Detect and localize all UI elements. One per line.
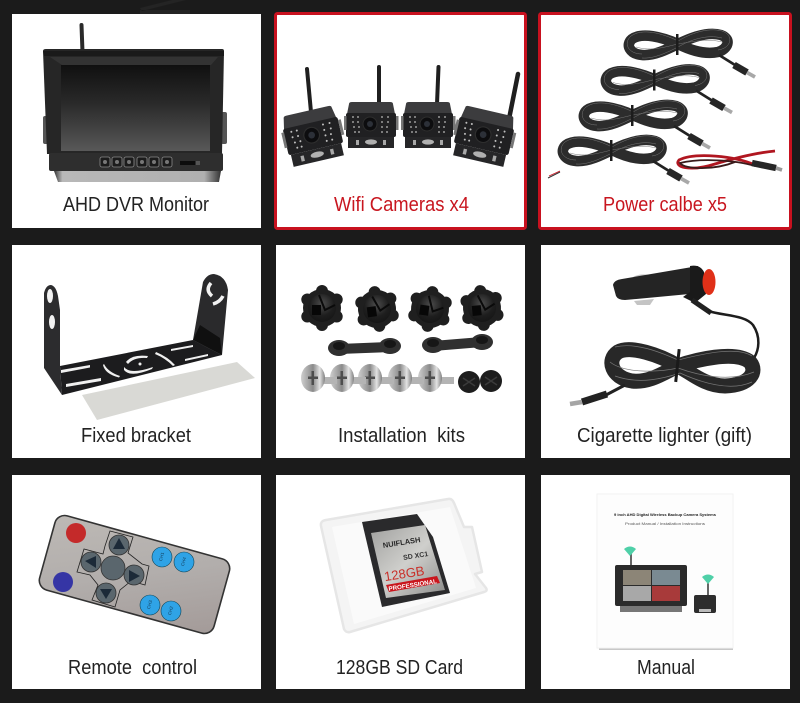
icon: manual camera — [694, 580, 716, 613]
label: Fixed bracket: Fixed bracket — [81, 425, 191, 447]
icon: metal bracket — [44, 274, 228, 395]
label: Installation kits: Installation kits — [338, 425, 465, 447]
icon: adhesive tape strip — [82, 362, 255, 420]
label: Power calbe x5: Power calbe x5 — [603, 194, 727, 216]
manual subtitle: Product Manual / Installation Instructions — [625, 522, 705, 526]
icon: knob 1 — [301, 285, 343, 331]
icon: cable coil 1 — [627, 30, 755, 77]
icon: lighter plug — [613, 266, 716, 313]
label: Manual: Manual — [637, 657, 695, 679]
icon: DVR monitor — [43, 25, 227, 182]
label: Remote control: Remote control — [68, 657, 197, 679]
icon: black caps — [458, 370, 502, 393]
manual title: 9 inch AHD Digital Wireless Backup Camera Systems — [614, 512, 716, 517]
channel buttons: CH1 — [158, 551, 165, 562]
icon: cable coil with plug — [570, 311, 758, 404]
icon: SD card: PROFESSIONAL — [388, 578, 438, 593]
icon: SD card: 128GB — [383, 563, 425, 584]
button: mute — [53, 572, 73, 592]
channel buttons: CH2 — [167, 605, 174, 616]
icon: cable coil 3 — [582, 101, 710, 148]
button: power — [66, 523, 86, 543]
label: Cigarette lighter (gift): Cigarette lighter (gift) — [577, 425, 752, 447]
icon: wifi camera 3 — [401, 67, 456, 148]
panel: AHD DVR Monitor — [12, 14, 261, 228]
label: AHD DVR Monitor: AHD DVR Monitor — [63, 194, 209, 216]
icon: wifi camera 4 — [449, 74, 520, 168]
icon: wifi camera 2 — [344, 67, 398, 148]
panel: Cigarette lighter — [541, 245, 790, 458]
icon: SD card: SD XC1 — [403, 551, 429, 562]
panel: Manual — [541, 475, 790, 689]
icon: steel screws — [301, 364, 454, 392]
label: Wifi Cameras x4: Wifi Cameras x4 — [334, 194, 469, 216]
panel: Power cable x5 — [540, 14, 790, 228]
icon: red and black power lead — [678, 151, 782, 170]
icon: cable coil 4 — [548, 136, 689, 183]
icon: wifi signal left — [624, 546, 636, 556]
icon: SD card: NUIFLASH — [382, 535, 421, 550]
panel: Remote control — [12, 475, 261, 689]
channel buttons: CH3 — [146, 599, 153, 610]
d-pad arrows — [85, 538, 140, 599]
panel: 128GB SD Card — [276, 475, 525, 689]
icon: link bar 1 — [328, 338, 401, 356]
channel buttons: CH4 — [180, 556, 187, 567]
icon: link bar 2 — [422, 334, 493, 353]
icon: knob 3 — [406, 283, 454, 335]
label: 128GB SD Card: 128GB SD Card — [336, 657, 463, 679]
d-pad buttons — [81, 535, 144, 603]
icon: wifi camera 1 — [278, 69, 349, 168]
icon: SD card — [362, 514, 450, 607]
icon: knob 2 — [353, 283, 401, 335]
manual booklet — [597, 494, 733, 650]
panel: Wifi Cameras x4 — [276, 14, 526, 228]
icon: plastic case — [321, 499, 487, 632]
panel: Installation kits — [276, 245, 525, 458]
panel: Fixed bracket — [12, 245, 261, 458]
channel buttons — [140, 547, 194, 621]
icon: wifi signal right — [702, 574, 714, 584]
icon: cable coil 2 — [604, 65, 732, 112]
icon: knob 4 — [459, 283, 505, 333]
icon: manual monitor — [615, 552, 687, 612]
icon: remote control — [37, 513, 232, 636]
